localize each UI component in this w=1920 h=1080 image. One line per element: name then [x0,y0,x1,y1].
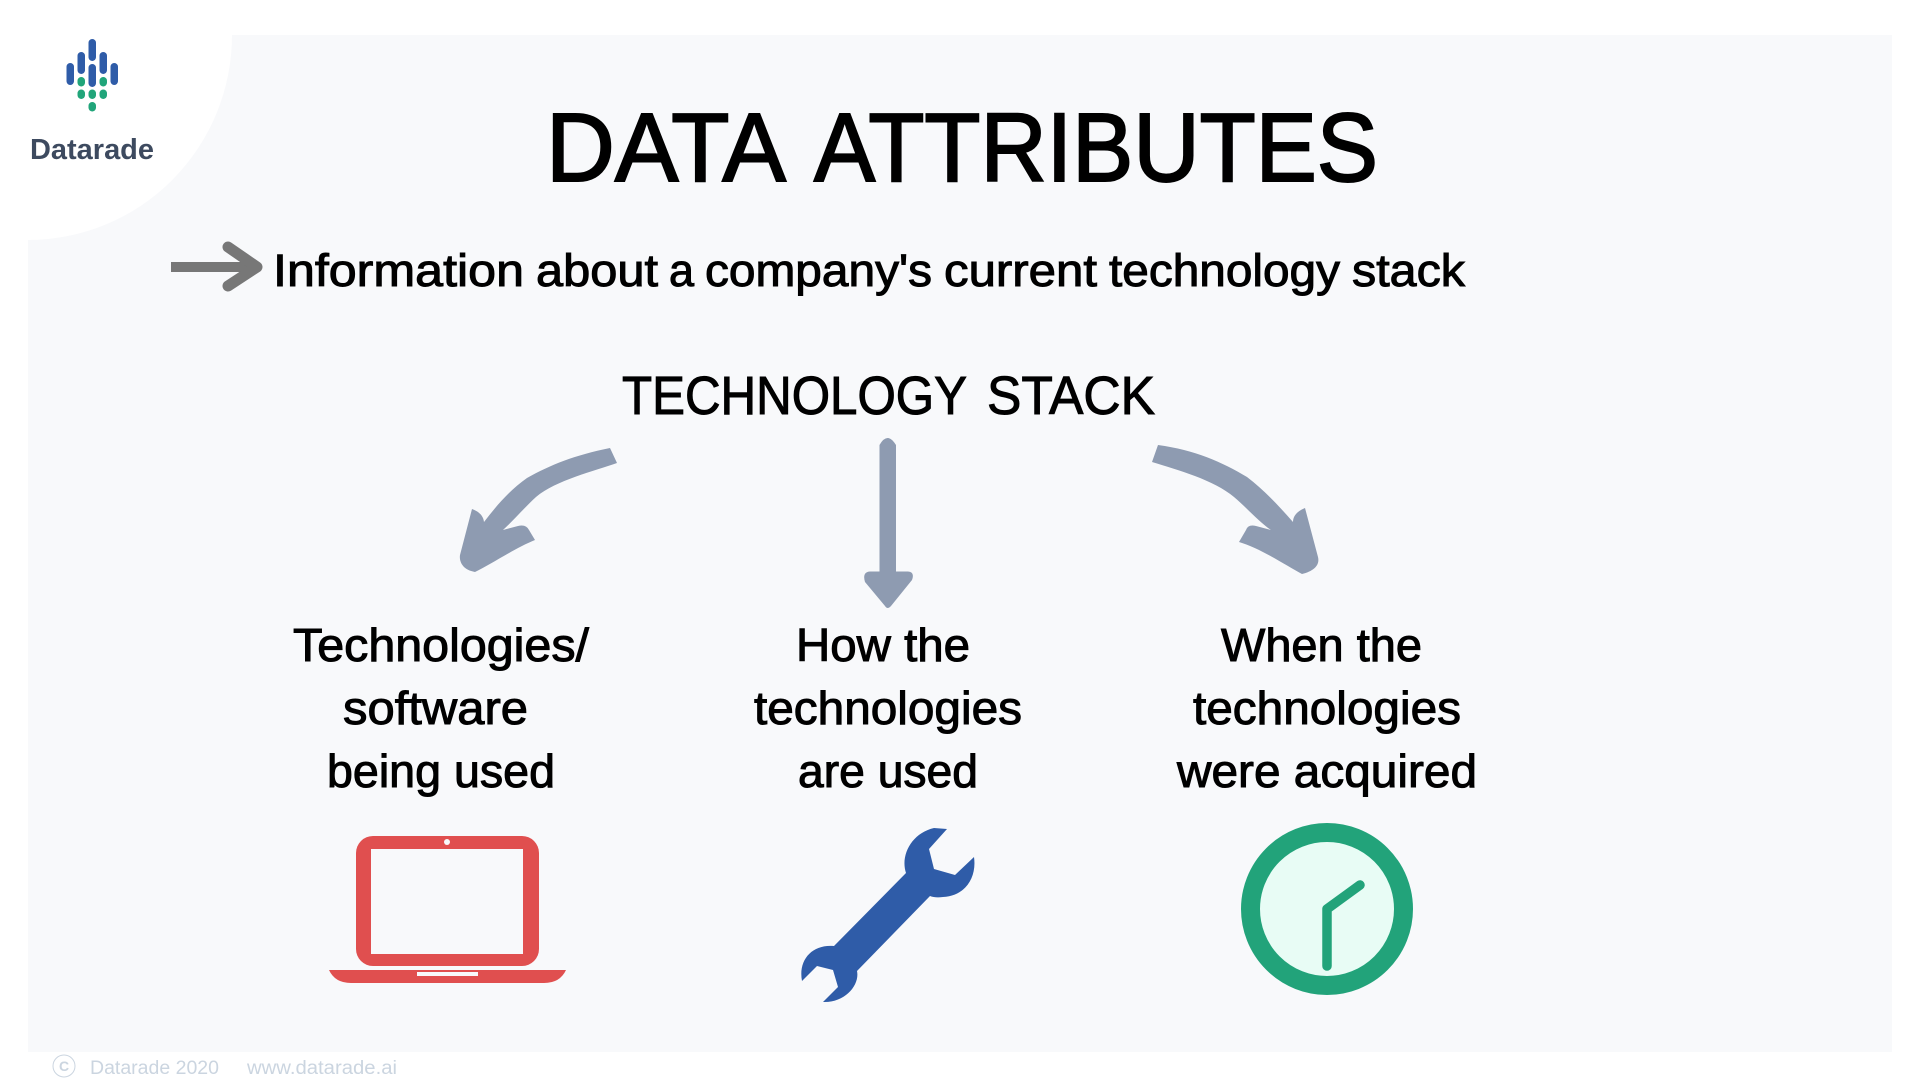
icon: logo bars [66,39,118,112]
logo: Datarade [30,39,154,166]
subtitle: about [536,245,659,296]
arrow: to subtitle [171,247,257,286]
subtitle: technology [1109,245,1341,296]
text: column 3: technologies [1193,682,1461,734]
logo wordmark: Datarade [30,134,154,166]
text: column 3: When the [1221,619,1422,671]
subtitle: a [669,245,695,296]
footer [53,1055,397,1079]
title: ATTRIBUTES [814,93,1378,202]
arrow: right curved [1152,445,1318,574]
text: column 2: How the [796,619,970,671]
subtitle: current [944,245,1098,296]
title: DATA [546,93,786,202]
arrow: center straight [864,438,913,608]
text: column 1: being used [327,745,555,797]
arrow: left curved [460,448,617,572]
text: column 3 [1176,619,1477,797]
icon: copyright: C [59,1058,69,1074]
text: column 2: are used [798,745,978,797]
text: column 1: software [343,682,528,734]
footer text: url: www.datarade.ai [246,1058,397,1079]
subtitle: Information [273,245,524,296]
text: column 2 [754,619,1022,797]
icon: wrench [801,828,974,1002]
heading: technology stack: STACK [987,366,1155,426]
icon: clock [1250,832,1404,986]
text: column 1 [293,619,589,797]
title [546,93,1378,202]
subtitle: stack [1352,245,1466,296]
icon: copyright [53,1055,75,1077]
subtitle: company's [705,245,932,296]
icon: laptop [329,836,566,983]
footer text: year: Datarade 2020 [90,1058,219,1079]
heading: technology stack: TECHNOLOGY [622,366,967,426]
text: column 3: were acquired [1176,745,1477,797]
subtitle [273,245,1466,296]
text: column 1: Technologies/ [293,619,589,671]
text: column 2: technologies [754,682,1022,734]
